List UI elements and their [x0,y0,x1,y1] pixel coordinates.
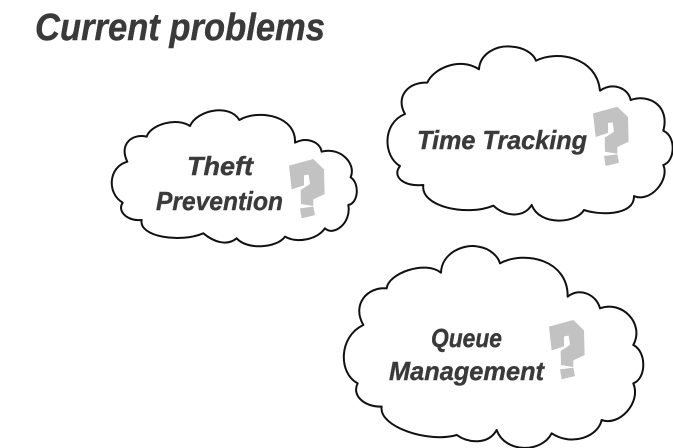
cloud outline: time tracking [387,46,673,221]
title: Current problems [35,7,325,49]
panel: time tracking cloud [387,46,673,221]
icon: question mark [593,107,629,166]
label: queue management: Management [389,356,545,386]
panel: theft prevention cloud [112,110,357,246]
label: theft prevention: Prevention [156,186,283,216]
icon: question mark [549,320,585,379]
label: theft prevention: Theft [187,151,254,181]
panel: queue management cloud [344,246,643,448]
label: queue management [389,323,545,386]
cloud outline: theft prevention [112,110,357,246]
icon: question mark [289,159,325,218]
label: time tracking: Time Tracking [417,125,587,155]
cloud outline: queue management [344,246,643,448]
label: theft prevention [156,151,283,216]
label: queue management: Queue [431,323,502,353]
